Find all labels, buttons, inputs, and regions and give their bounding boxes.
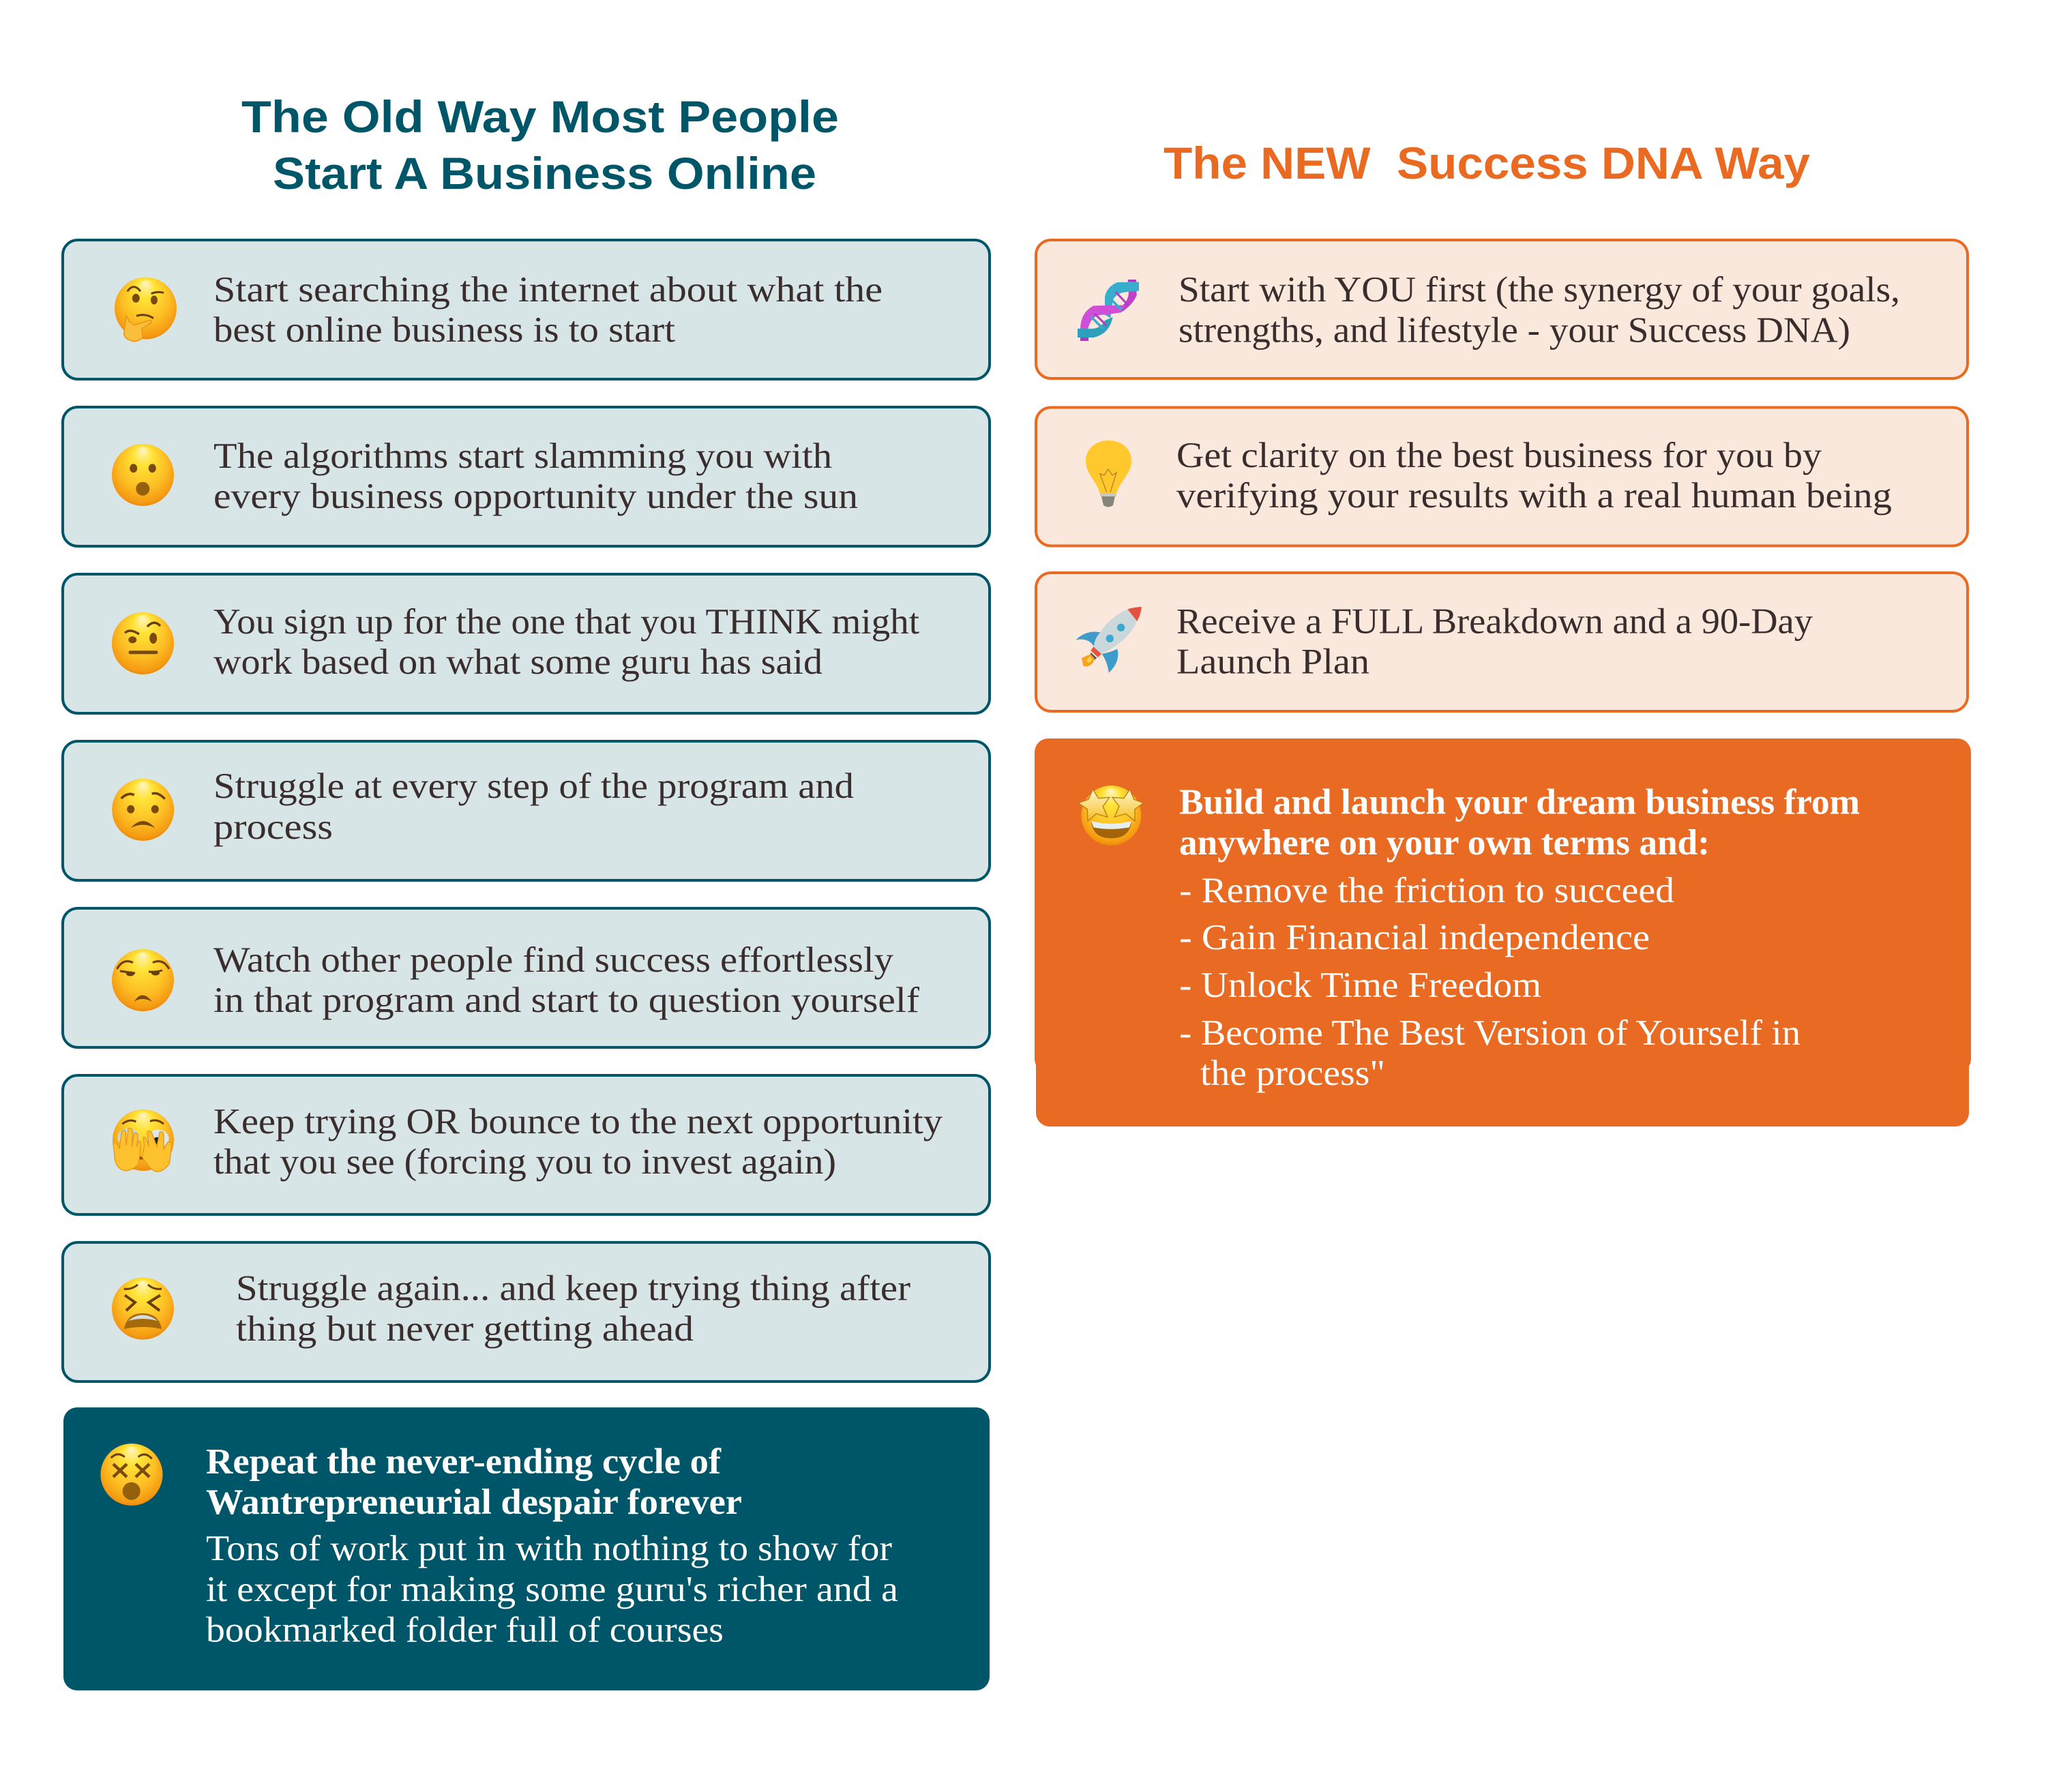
text: outcome: bookmarked folder full of courses [206,1611,724,1650]
text: step 7 [236,1268,910,1349]
panel: old way step 1 [63,240,990,379]
title: old way heading: Start A Business Online [273,148,816,198]
panel: old way step 6 [63,1075,990,1214]
icon: worried face [112,779,174,841]
panel: old way step 4 [63,741,990,880]
text: step 2: every business opportunity under the sun [213,477,858,516]
panel: old way step 5 [63,908,990,1047]
text: step 4 [213,766,854,847]
panel: new way step 2 [1036,408,1968,546]
icon: dizzy face [101,1444,162,1506]
text: outcome: it except for making some guru's richer and a [206,1570,898,1609]
text: step 2 [213,436,858,516]
text: step 5: Watch other people find success effortlessly [213,940,894,980]
text: step 5 [213,940,919,1020]
text: step 4: process [213,807,333,847]
text: outcome: Wantrepreneurial despair forever [206,1482,742,1522]
panel: new way step 3 [1036,573,1968,711]
text: step 6 [213,1102,943,1182]
icon: weary face [112,1278,174,1339]
icon: fearful face with hands over eyes [113,1109,174,1171]
text: new step 3: Launch Plan [1176,642,1369,682]
icon: unamused face [112,949,174,1011]
text: new outcome: Build and launch your dream business from [1179,783,1860,822]
text: step 4: Struggle at every step of the program and [213,766,854,806]
icon: star-struck face [1078,786,1144,846]
text: step 7: thing but never getting ahead [236,1309,694,1349]
text: step 1 [213,270,883,350]
text: new outcome: - Unlock Time Freedom [1179,966,1541,1005]
text: new outcome: the process" [1200,1054,1385,1093]
text: new step 1: strengths, and lifestyle - your Success DNA) [1178,311,1850,350]
text: new step 2 [1176,436,1892,516]
text: outcome: Tons of work put in with nothing to show for [206,1529,892,1568]
panel: old way step 3 [63,574,990,713]
panel: old way step 7 [63,1242,990,1382]
panel: new way step 1 [1036,240,1968,378]
text: step 5: in that program and start to question yourself [213,981,919,1020]
text: step 7: Struggle again... and keep trying thing after [236,1268,910,1308]
text: new step 2: verifying your results with a real human being [1176,476,1892,516]
text: step 3: work based on what some guru has said [213,642,822,682]
title: old way heading: The Old Way Most People [241,91,839,142]
icon: raised eyebrow face [112,612,174,674]
icon: rocket [1076,607,1142,673]
text: outcome [206,1442,898,1650]
text: step 1: Start searching the internet about what the [213,270,883,310]
text: new step 3 [1176,601,1813,682]
text: new step 2: Get clarity on the best business for you by [1176,436,1822,475]
text: step 1: best online business is to start [213,310,675,350]
panel: old way step 2 [63,407,990,546]
text: step 6: Keep trying OR bounce to the next opportunity [213,1102,943,1141]
title: new way heading: The NEW Success DNA Way [1163,138,1810,188]
text: new outcome: anywhere on your own terms and: [1179,823,1710,863]
text: step 3 [213,602,919,682]
text: step 3: You sign up for the one that you THINK might [213,602,919,642]
icon: surprised face [112,444,174,506]
text: new outcome: - Gain Financial independence [1179,918,1650,957]
text: new outcome: - Become The Best Version of Yourself in [1179,1013,1800,1053]
text: step 2: The algorithms start slamming you with [213,436,832,476]
text: new outcome [1179,783,1860,1093]
text: step 6: that you see (forcing you to invest again) [213,1142,836,1182]
text: new step 1: Start with YOU first (the synergy of your goals, [1178,270,1900,310]
icon: light bulb [1086,440,1131,507]
text: new step 1 [1178,270,1900,350]
text: new step 3: Receive a FULL Breakdown and a 90-Day [1176,601,1813,641]
panel: new way outcome [1035,738,1971,1126]
text: new outcome: - Remove the friction to succeed [1179,871,1674,910]
title: old way heading [241,91,839,198]
text: outcome: Repeat the never-ending cycle of [206,1442,722,1481]
icon: dna helix [1078,280,1139,341]
icon: thinking face [115,277,177,342]
panel: old way outcome [63,1407,990,1690]
